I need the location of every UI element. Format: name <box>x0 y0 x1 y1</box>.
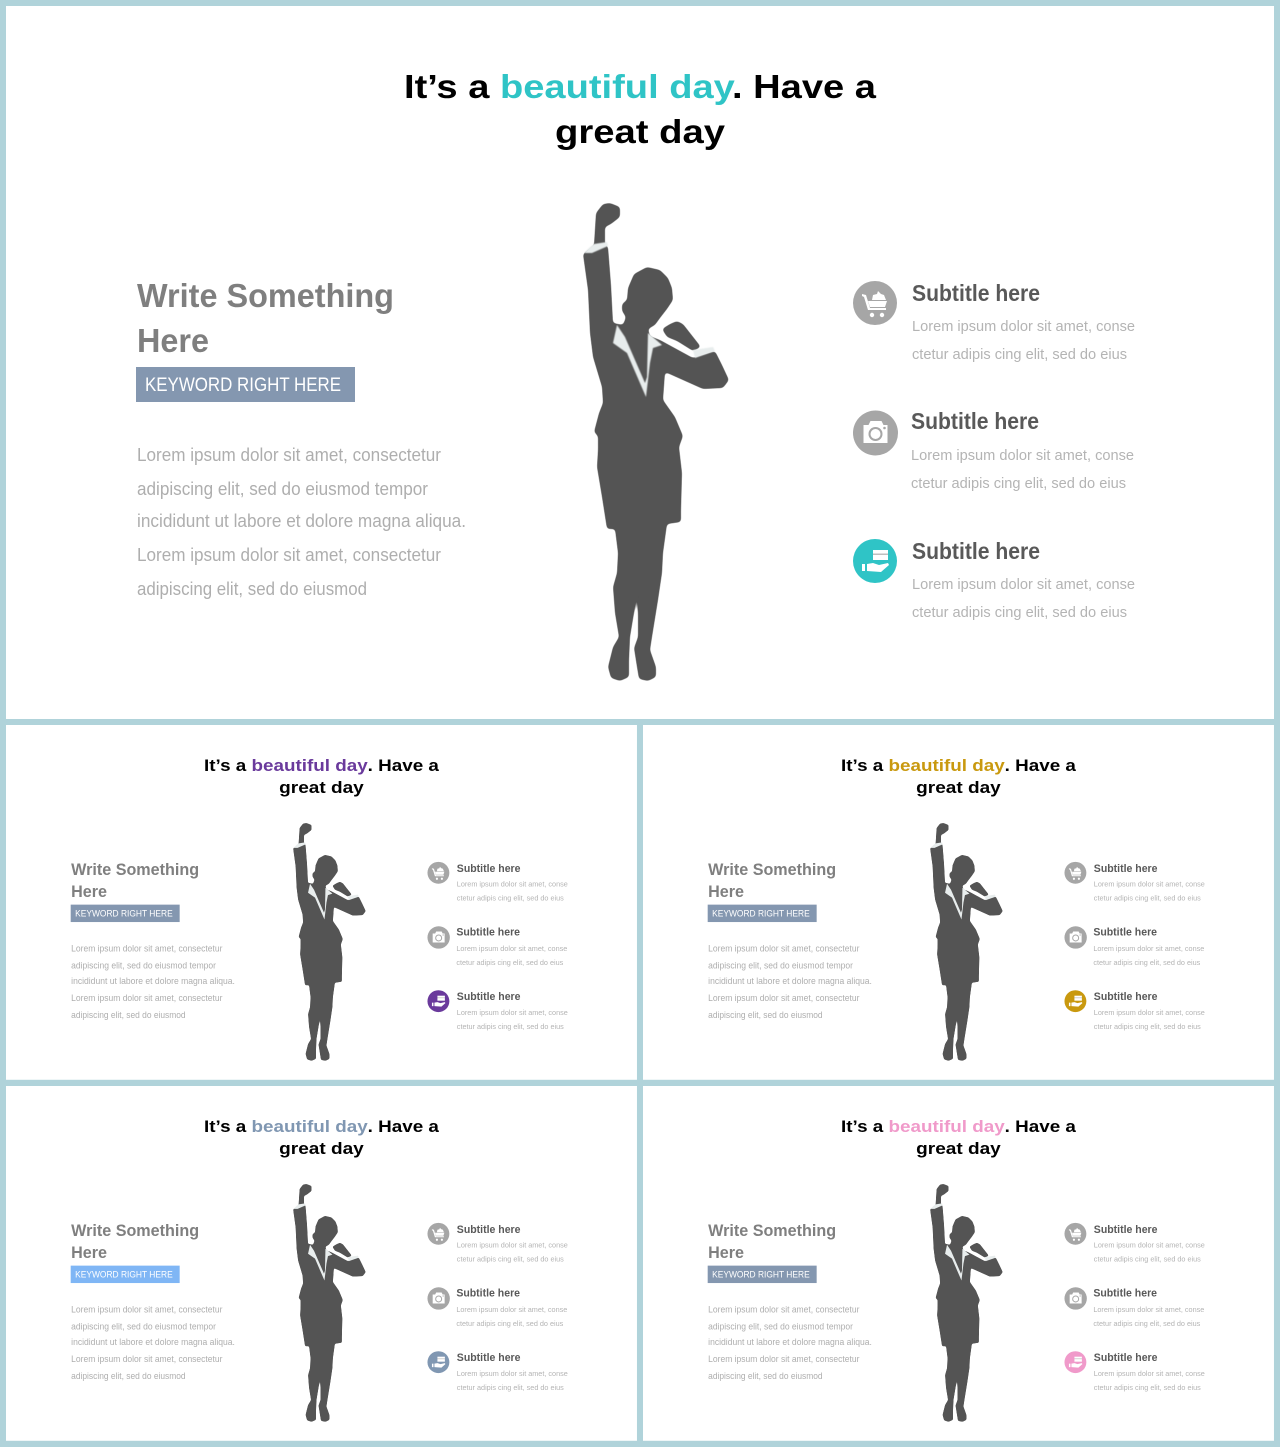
item 2 text: Subtitle here <box>1093 1287 1157 1299</box>
title: It’s a beautiful day . Have a <box>841 757 1077 775</box>
item 3 text: Subtitle here <box>912 538 1040 564</box>
item 2 text: ctetur adipis cing elit, sed do eius <box>456 1319 564 1328</box>
body text: adipiscing elit, sed do eiusmod <box>137 579 367 599</box>
silhouette: businesswoman <box>583 203 729 681</box>
body text: adipiscing elit, sed do eiusmod tempor <box>71 1321 216 1331</box>
heading: write something here <box>71 861 199 901</box>
panel: purple slide <box>6 725 637 1080</box>
icon: camera <box>853 410 898 456</box>
heading: write something here <box>71 1222 199 1262</box>
keyword tag <box>71 905 180 922</box>
icon: hand with cards <box>427 990 449 1012</box>
title: great day <box>916 779 1002 797</box>
body text: Lorem ipsum dolor sit amet, consectetur <box>708 943 859 953</box>
item 1 text: Lorem ipsum dolor sit amet, conse <box>912 318 1135 335</box>
heading: write something here: Write Something <box>708 1222 836 1240</box>
keyword tag <box>136 367 355 402</box>
body text: incididunt ut labore et dolore magna aliqua. <box>71 1337 235 1347</box>
item 3 text: ctetur adipis cing elit, sed do eius <box>1094 1022 1201 1031</box>
item 3 text: ctetur adipis cing elit, sed do eius <box>1094 1383 1201 1392</box>
icon: shopping cart <box>853 281 897 325</box>
item 3 text <box>1094 991 1205 1031</box>
body text: adipiscing elit, sed do eiusmod tempor <box>708 1321 853 1331</box>
icon: shopping cart <box>1064 1223 1086 1245</box>
panel: main teal slide <box>6 6 1274 719</box>
title: great day <box>279 1140 365 1158</box>
title <box>204 1118 440 1158</box>
icon: camera <box>427 1287 450 1310</box>
item 1 text: ctetur adipis cing elit, sed do eius <box>1094 1255 1201 1264</box>
heading: write something here: Write Something <box>137 277 394 314</box>
item 2 text: Lorem ipsum dolor sit amet, conse <box>456 944 567 953</box>
item 3 text <box>457 1352 568 1392</box>
item 1 text <box>1094 1224 1205 1264</box>
item 2 text <box>456 1287 567 1328</box>
body text: Lorem ipsum dolor sit amet, consectetur <box>137 545 441 565</box>
item 2 text: Subtitle here <box>456 1287 520 1299</box>
body text <box>708 943 872 1020</box>
item 1 text: Lorem ipsum dolor sit amet, conse <box>457 880 568 889</box>
item 2 text: Subtitle here <box>456 926 520 938</box>
icon: hand with cards <box>1064 1351 1086 1373</box>
panel: slate slide <box>6 1086 637 1441</box>
body text: adipiscing elit, sed do eiusmod <box>708 1010 823 1020</box>
icon: shopping cart <box>427 862 449 884</box>
icon: camera <box>427 926 450 949</box>
icon: hand with cards <box>1064 990 1086 1012</box>
title: It’s a beautiful day . Have a <box>204 1118 440 1136</box>
body text: adipiscing elit, sed do eiusmod tempor <box>708 960 853 970</box>
body text: Lorem ipsum dolor sit amet, consectetur <box>708 993 859 1003</box>
item 1 text: Subtitle here <box>457 1224 521 1236</box>
item 3 text: Subtitle here <box>457 991 521 1003</box>
icon: camera <box>1064 926 1087 949</box>
item 3 text: Lorem ipsum dolor sit amet, conse <box>457 1369 568 1378</box>
item 1 text: Lorem ipsum dolor sit amet, conse <box>457 1241 568 1250</box>
body text: Lorem ipsum dolor sit amet, consectetur <box>71 943 222 953</box>
keyword tag <box>708 905 817 922</box>
silhouette: businesswoman <box>293 823 366 1061</box>
item 2 text: Lorem ipsum dolor sit amet, conse <box>1093 944 1204 953</box>
body text: incididunt ut labore et dolore magna aliqua. <box>71 976 235 986</box>
title: It’s a beautiful day . Have a <box>404 68 877 105</box>
body text: adipiscing elit, sed do eiusmod tempor <box>71 960 216 970</box>
heading: write something here: Here <box>137 322 209 359</box>
item 1 text <box>457 863 568 903</box>
panel: pink slide <box>643 1086 1274 1441</box>
title <box>841 757 1077 797</box>
body text: adipiscing elit, sed do eiusmod tempor <box>137 479 428 499</box>
title <box>204 757 440 797</box>
heading: write something here: Here <box>708 883 744 901</box>
item 3 text: ctetur adipis cing elit, sed do eius <box>457 1022 564 1031</box>
item 3 text <box>912 538 1135 621</box>
body text: Lorem ipsum dolor sit amet, consectetur <box>71 993 222 1003</box>
item 2 text: Subtitle here <box>1093 926 1157 938</box>
item 1 text: Subtitle here <box>912 280 1040 306</box>
icon: hand with cards <box>853 539 897 583</box>
item 1 text: Subtitle here <box>1094 1224 1158 1236</box>
heading: write something here: Write Something <box>71 1222 199 1240</box>
item 2 text: ctetur adipis cing elit, sed do eius <box>1093 1319 1201 1328</box>
item 1 text <box>457 1224 568 1264</box>
heading: write something here <box>708 1222 836 1262</box>
item 1 text: Lorem ipsum dolor sit amet, conse <box>1094 1241 1205 1250</box>
heading: write something here: Here <box>71 883 107 901</box>
icon: camera <box>1064 1287 1087 1310</box>
silhouette: businesswoman <box>293 1184 366 1422</box>
item 3 text: Subtitle here <box>1094 991 1158 1003</box>
item 3 text <box>1094 1352 1205 1392</box>
item 3 text: Subtitle here <box>457 1352 521 1364</box>
body text: adipiscing elit, sed do eiusmod <box>71 1371 186 1381</box>
item 2 text: ctetur adipis cing elit, sed do eius <box>911 475 1126 492</box>
item 2 text <box>911 408 1134 492</box>
item 2 text: ctetur adipis cing elit, sed do eius <box>1093 958 1201 967</box>
item 2 text: Lorem ipsum dolor sit amet, conse <box>911 447 1134 464</box>
body text: Lorem ipsum dolor sit amet, consectetur <box>137 445 441 465</box>
item 1 text: Subtitle here <box>1094 863 1158 875</box>
body text: incididunt ut labore et dolore magna aliqua. <box>708 976 872 986</box>
title: great day <box>916 1140 1002 1158</box>
title: It’s a beautiful day . Have a <box>841 1118 1077 1136</box>
item 2 text <box>456 926 567 967</box>
heading: write something here: Here <box>708 1244 744 1262</box>
body text: incididunt ut labore et dolore magna aliqua. <box>708 1337 872 1347</box>
item 2 text: Lorem ipsum dolor sit amet, conse <box>456 1305 567 1314</box>
silhouette: businesswoman <box>930 1184 1003 1422</box>
heading: write something here <box>137 277 394 359</box>
keyword tag: KEYWORD RIGHT HERE <box>75 1270 173 1281</box>
body text: Lorem ipsum dolor sit amet, consectetur <box>71 1354 222 1364</box>
keyword tag: KEYWORD RIGHT HERE <box>712 1270 810 1281</box>
body text <box>71 943 235 1020</box>
silhouette: businesswoman <box>930 823 1003 1061</box>
item 1 text: ctetur adipis cing elit, sed do eius <box>457 1255 564 1264</box>
title <box>841 1118 1077 1158</box>
keyword tag: KEYWORD RIGHT HERE <box>145 375 341 396</box>
item 2 text <box>1093 1287 1204 1328</box>
body text <box>71 1304 235 1381</box>
item 3 text: Lorem ipsum dolor sit amet, conse <box>457 1008 568 1017</box>
panel: gold slide <box>643 725 1274 1080</box>
keyword tag <box>708 1266 817 1283</box>
icon: shopping cart <box>1064 862 1086 884</box>
item 1 text: ctetur adipis cing elit, sed do eius <box>1094 894 1201 903</box>
body text: adipiscing elit, sed do eiusmod <box>71 1010 186 1020</box>
title: great day <box>279 779 365 797</box>
keyword tag <box>71 1266 180 1283</box>
item 1 text: ctetur adipis cing elit, sed do eius <box>457 894 564 903</box>
item 2 text: Lorem ipsum dolor sit amet, conse <box>1093 1305 1204 1314</box>
item 1 text <box>912 280 1135 363</box>
body text: Lorem ipsum dolor sit amet, consectetur <box>708 1354 859 1364</box>
icon: shopping cart <box>427 1223 449 1245</box>
item 1 text: Lorem ipsum dolor sit amet, conse <box>1094 880 1205 889</box>
item 3 text: ctetur adipis cing elit, sed do eius <box>457 1383 564 1392</box>
item 2 text: Subtitle here <box>911 408 1039 434</box>
body text <box>137 445 466 599</box>
title: great day <box>555 113 726 150</box>
body text <box>708 1304 872 1381</box>
title <box>404 68 877 150</box>
heading: write something here: Write Something <box>708 861 836 879</box>
body text: Lorem ipsum dolor sit amet, consectetur <box>708 1304 859 1314</box>
heading: write something here: Write Something <box>71 861 199 879</box>
body text: Lorem ipsum dolor sit amet, consectetur <box>71 1304 222 1314</box>
item 3 text: Subtitle here <box>1094 1352 1158 1364</box>
item 1 text: ctetur adipis cing elit, sed do eius <box>912 346 1127 363</box>
keyword tag: KEYWORD RIGHT HERE <box>712 909 810 920</box>
icon: hand with cards <box>427 1351 449 1373</box>
item 1 text: Subtitle here <box>457 863 521 875</box>
body text: incididunt ut labore et dolore magna aliqua. <box>137 511 466 531</box>
body text: adipiscing elit, sed do eiusmod <box>708 1371 823 1381</box>
item 3 text: Lorem ipsum dolor sit amet, conse <box>912 576 1135 593</box>
keyword tag: KEYWORD RIGHT HERE <box>75 909 173 920</box>
item 3 text <box>457 991 568 1031</box>
item 2 text: ctetur adipis cing elit, sed do eius <box>456 958 564 967</box>
item 1 text <box>1094 863 1205 903</box>
item 3 text: Lorem ipsum dolor sit amet, conse <box>1094 1008 1205 1017</box>
heading: write something here <box>708 861 836 901</box>
title: It’s a beautiful day . Have a <box>204 757 440 775</box>
item 3 text: ctetur adipis cing elit, sed do eius <box>912 604 1127 621</box>
item 2 text <box>1093 926 1204 967</box>
heading: write something here: Here <box>71 1244 107 1262</box>
item 3 text: Lorem ipsum dolor sit amet, conse <box>1094 1369 1205 1378</box>
